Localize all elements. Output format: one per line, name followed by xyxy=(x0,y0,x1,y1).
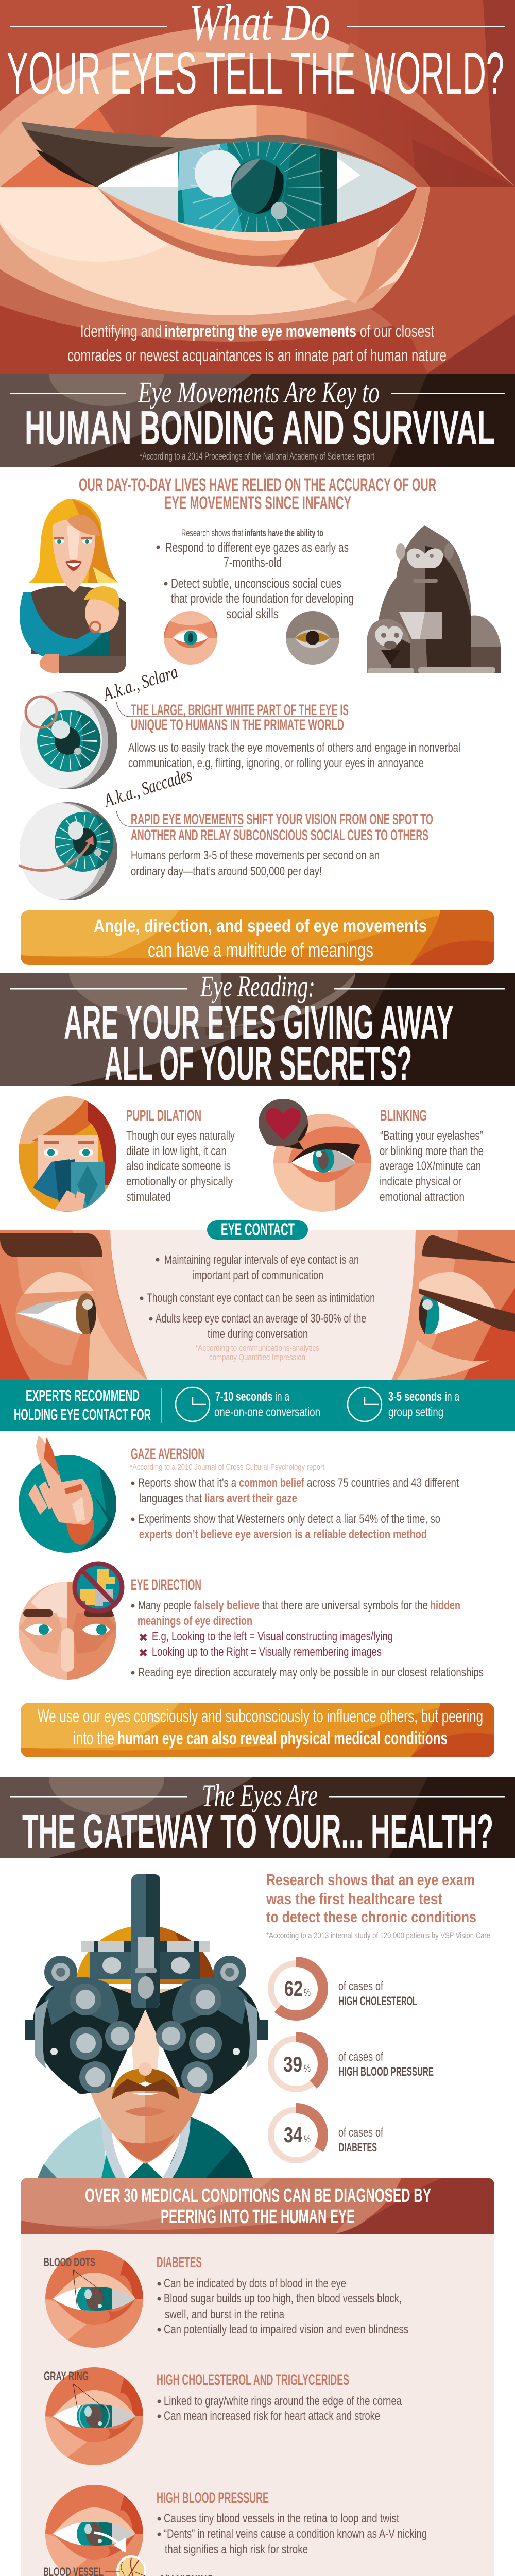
text: high blood pressure: HIGH BLOOD PRESSURE xyxy=(157,2489,269,2506)
icon: gorillas xyxy=(367,525,501,673)
icon: hero eye xyxy=(97,138,417,235)
text: eye contact bullets: *According to communications-analytics xyxy=(195,1343,319,1353)
icon: upper eyelid xyxy=(97,105,430,187)
callout: sclara: THE LARGE, BRIGHT WHITE PART OF THE EYE IS xyxy=(131,702,349,719)
callout: sclara: UNIQUE TO HUMANS IN THE PRIMATE WORLD xyxy=(131,717,344,734)
text: gaze aversion: Reports show that it’s a xyxy=(138,1476,236,1490)
text: eye direction: ✖ xyxy=(139,1647,148,1660)
hero panel xyxy=(0,0,515,374)
icon: clock xyxy=(348,1387,382,1421)
text: blinking: average 10X/minute can xyxy=(380,1159,481,1173)
panel: experts recommend xyxy=(0,1380,515,1431)
icon: saccade eyeball xyxy=(20,802,117,900)
intro text: Identifying and xyxy=(80,321,162,341)
text: gaze aversion: languages that xyxy=(139,1492,202,1505)
text: eye contact bullets: time during conversation xyxy=(208,1327,308,1341)
text: blinking xyxy=(380,1107,484,1204)
banner: physical medical conditions xyxy=(21,1703,494,1757)
text: infant abilities: Research shows that xyxy=(181,528,243,539)
text: blinking: emotional attraction xyxy=(380,1190,465,1204)
text: pupil dilation: stimulated xyxy=(126,1190,171,1204)
text: eye direction: that there are universal symbols for the xyxy=(262,1599,428,1613)
section header: eye reading xyxy=(0,973,515,1086)
text: pupil dilation: dilate in low light, it can xyxy=(126,1144,227,1158)
text: infant abilities: social skills xyxy=(226,606,279,621)
icon: phoropter dials xyxy=(44,1956,246,2093)
text: gaze aversion: common belief xyxy=(239,1476,305,1490)
text: diabetes xyxy=(157,2254,408,2336)
callout: blood vessel and nicking xyxy=(43,2565,214,2576)
text: high blood pressure xyxy=(157,2489,427,2556)
title xyxy=(7,0,505,107)
icon: no puzzle xyxy=(75,1564,122,1611)
icon: blood pressure eye xyxy=(45,2485,145,2576)
icon: right face xyxy=(391,1230,515,1380)
text: high blood pressure: Causes tiny blood vessels in the retina to loop and twist xyxy=(164,2512,399,2526)
callout: saccades: Humans perform 3-5 of these movements per second on an xyxy=(131,849,380,862)
text: pupil dilation: also indicate someone is xyxy=(126,1159,231,1173)
panel: experts recommend: EXPERTS RECOMMEND xyxy=(26,1386,140,1404)
label pill: eye contact xyxy=(207,1220,308,1240)
text: eye direction: E.g, Looking to the left = Visual constructing images/lying xyxy=(152,1630,393,1643)
callout: sclara: A.k.a., Sclara xyxy=(100,661,180,705)
text: 7-10 seconds: one-on-one conversation xyxy=(214,1405,320,1419)
text: blinking: or blinking more than the xyxy=(380,1144,484,1158)
intro text: of our closest xyxy=(360,321,434,341)
text: 3-5 seconds xyxy=(388,1389,459,1419)
donut chart: 62 percent: of cases of xyxy=(338,1979,383,1993)
donut chart: 34 percent: % xyxy=(304,2134,311,2145)
label pill: eye contact: EYE CONTACT xyxy=(221,1220,295,1240)
section header: human bonding: Eye Movements Are Key to xyxy=(138,376,380,409)
callout: saccades: ordinary day—that’s around 500,000 per day! xyxy=(131,865,322,878)
text: 7-10 seconds: in a xyxy=(275,1389,289,1404)
icon: sclera eyeball xyxy=(20,691,117,789)
donut chart: 39 percent: 39 xyxy=(283,2052,302,2076)
callout: saccades xyxy=(101,764,433,878)
icon: blinking eye with heart bubble xyxy=(259,1099,372,1213)
intro text: interpreting the eye movements xyxy=(164,321,356,341)
text: eye contact bullets: Adults keep eye contact an average of 30-60% of the xyxy=(156,1312,366,1326)
text: blinking: indicate physical or xyxy=(380,1175,461,1189)
icon: pupil dilation woman with cards xyxy=(19,1096,117,1212)
icon: human eye small xyxy=(164,611,217,665)
text: pupil dilation: Though our eyes naturally xyxy=(126,1129,235,1143)
text: high cholesterol: HIGH CHOLESTEROL AND TRIGLYCERIDES xyxy=(157,2371,349,2388)
text: pupil dilation xyxy=(126,1107,235,1204)
text: 7-10 seconds xyxy=(214,1389,320,1419)
text: blinking: BLINKING xyxy=(380,1107,427,1124)
text: eye direction: EYE DIRECTION xyxy=(131,1577,201,1594)
section header: human bonding: *According to a 2014 Proceedings of the National Academy of Sciences report xyxy=(140,451,374,462)
icon: crossed fingers xyxy=(19,1435,124,1553)
banner: angle direction speed: Angle, direction, and speed of eye movements xyxy=(94,916,427,936)
text: 3-5 seconds: group setting xyxy=(388,1405,443,1419)
text: diabetes: Blood sugar builds up too high, then blood vessels block, xyxy=(164,2292,402,2306)
text: eye direction: falsely believe xyxy=(194,1599,260,1613)
text: infant abilities: infants have the ability to xyxy=(245,528,323,539)
text: gaze aversion: across 75 countries and 43 different xyxy=(307,1476,459,1490)
text: infant abilities: that provide the foundation for developing xyxy=(171,590,354,606)
text: eye contact bullets: important part of communication xyxy=(192,1268,323,1282)
donut chart: 39 percent: HIGH BLOOD PRESSURE xyxy=(339,2065,434,2079)
text: 3-5 seconds: 3-5 seconds xyxy=(388,1389,442,1404)
donut chart: 39 percent xyxy=(269,2037,434,2091)
icon: clock xyxy=(176,1387,210,1421)
callout: gray ring: GRAY RING xyxy=(44,2369,89,2383)
text: gaze aversion: *According to a 2010 Journal of Cross Cultural Psychology report xyxy=(130,1462,324,1472)
text: eye contact bullets: Though constant eye contact can be seen as intimidation xyxy=(147,1291,375,1305)
heading: infancy xyxy=(79,475,436,513)
donut chart: 62 percent: HIGH CHOLESTEROL xyxy=(339,1994,417,2008)
text: diabetes: DIABETES xyxy=(157,2254,202,2271)
text: high cholesterol: Can mean increased risk for heart attack and stroke xyxy=(164,2409,380,2423)
callout: gray ring xyxy=(44,2369,107,2410)
icon: optometrist with phoropter xyxy=(25,1874,268,2178)
text: eye direction xyxy=(131,1577,484,1680)
callout: blood dots: BLOOD DOTS xyxy=(44,2256,95,2269)
text: infant abilities xyxy=(157,528,354,621)
text: diabetes: swell, and burst in the retina xyxy=(165,2308,285,2321)
text: eye contact bullets xyxy=(140,1253,375,1362)
text: eye direction: meanings of eye direction xyxy=(138,1614,252,1628)
section header: eye reading: Eye Reading: xyxy=(200,970,315,1003)
text: infant abilities: Respond to different eye gazes as early as xyxy=(165,539,349,555)
text: eye direction: ✖ xyxy=(139,1632,148,1645)
text: 7-10 seconds: 7-10 seconds xyxy=(215,1389,272,1404)
panel: experts recommend: HOLDING EYE CONTACT FOR xyxy=(14,1405,151,1423)
panel: medical conditions xyxy=(21,2178,494,2576)
text: gaze aversion: experts don’t believe eye aversion is a reliable detection method xyxy=(139,1528,427,1541)
callout: sclara: communication, e.g, flirting, ignoring, or rolling your eyes in annoyance xyxy=(128,756,424,770)
text: gaze aversion: GAZE AVERSION xyxy=(131,1446,204,1463)
lower face shapes xyxy=(0,187,515,374)
text: high cholesterol: Linked to gray/white rings around the edge of the cornea xyxy=(164,2394,402,2408)
donut chart: 39 percent: of cases of xyxy=(338,2050,383,2064)
icon: face with crossed-out puzzle xyxy=(19,1564,122,1680)
text: gaze aversion xyxy=(130,1446,459,1541)
text: research shows xyxy=(266,1871,490,1940)
text: eye direction: Looking up to the Right = Visually remembering images xyxy=(152,1645,382,1659)
section header: gateway to health xyxy=(0,1777,515,1858)
header: over 30 conditions: PEERING INTO THE HUMAN EYE xyxy=(161,2206,355,2228)
donut chart: 39 percent: % xyxy=(304,2063,311,2074)
icon: left face xyxy=(0,1230,149,1380)
donut chart: 34 percent: 34 xyxy=(284,2123,302,2147)
text: infant abilities: Detect subtle, unconscious social cues xyxy=(171,575,341,591)
heading: infancy: EYE MOVEMENTS SINCE INFANCY xyxy=(164,493,351,513)
icon: mother and baby xyxy=(20,499,126,673)
text: eye contact bullets: company Quantified Impression xyxy=(209,1352,305,1362)
text: pupil dilation: emotionally or physically xyxy=(126,1175,233,1189)
text: gaze aversion: liars avert their gaze xyxy=(204,1492,297,1505)
icon: eye liner xyxy=(21,122,416,187)
donut chart: 62 percent xyxy=(269,1962,417,2015)
icon: gray ring eye xyxy=(45,2367,143,2465)
intro text xyxy=(67,321,447,365)
text: diabetes: Can potentially lead to impaired vision and even blindness xyxy=(164,2323,408,2336)
icon: diabetes eye xyxy=(45,2250,143,2348)
text: infant abilities: 7-months-old xyxy=(224,554,282,570)
text: eye direction: hidden xyxy=(430,1599,460,1613)
donut chart: 34 percent: DIABETES xyxy=(339,2141,377,2155)
text: research shows: was the first healthcare test xyxy=(266,1890,442,1908)
donut chart: 62 percent: 62 xyxy=(284,1976,303,2001)
text: eye direction: Many people xyxy=(138,1599,191,1613)
banner: angle direction speed: can have a multitude of meanings xyxy=(148,940,373,961)
donut chart: 34 percent: of cases of xyxy=(338,2126,383,2140)
text: diabetes: Can be indicated by dots of blood in the eye xyxy=(164,2277,346,2291)
text: high cholesterol xyxy=(157,2371,402,2423)
text: high blood pressure: “Dents” in retinal veins cause a condition known as A-V nicking xyxy=(164,2527,427,2541)
callout: blood dots xyxy=(44,2256,100,2308)
header: over 30 conditions xyxy=(21,2178,494,2234)
banner: physical medical conditions: into the xyxy=(73,1727,114,1749)
donut chart: 62 percent: % xyxy=(304,1988,311,1998)
callout: sclara xyxy=(100,661,460,770)
text: pupil dilation: PUPIL DILATION xyxy=(126,1107,201,1124)
text: 3-5 seconds: in a xyxy=(445,1389,459,1404)
banner: angle direction speed xyxy=(21,910,494,965)
icon: gorilla eye small xyxy=(286,611,339,665)
section header: gateway to health: The Eyes Are xyxy=(202,1778,318,1812)
donut chart: 34 percent xyxy=(269,2108,383,2162)
text: blinking: “Batting your eyelashes” xyxy=(380,1129,483,1143)
text: eye contact bullets: Maintaining regular intervals of eye contact is an xyxy=(164,1253,359,1267)
panel: eye contact xyxy=(0,1230,515,1380)
text: high blood pressure: that signifies a high risk for stroke xyxy=(165,2543,308,2556)
callout: saccades: A.k.a., Saccades xyxy=(101,764,194,811)
section header: human bonding xyxy=(0,374,515,467)
